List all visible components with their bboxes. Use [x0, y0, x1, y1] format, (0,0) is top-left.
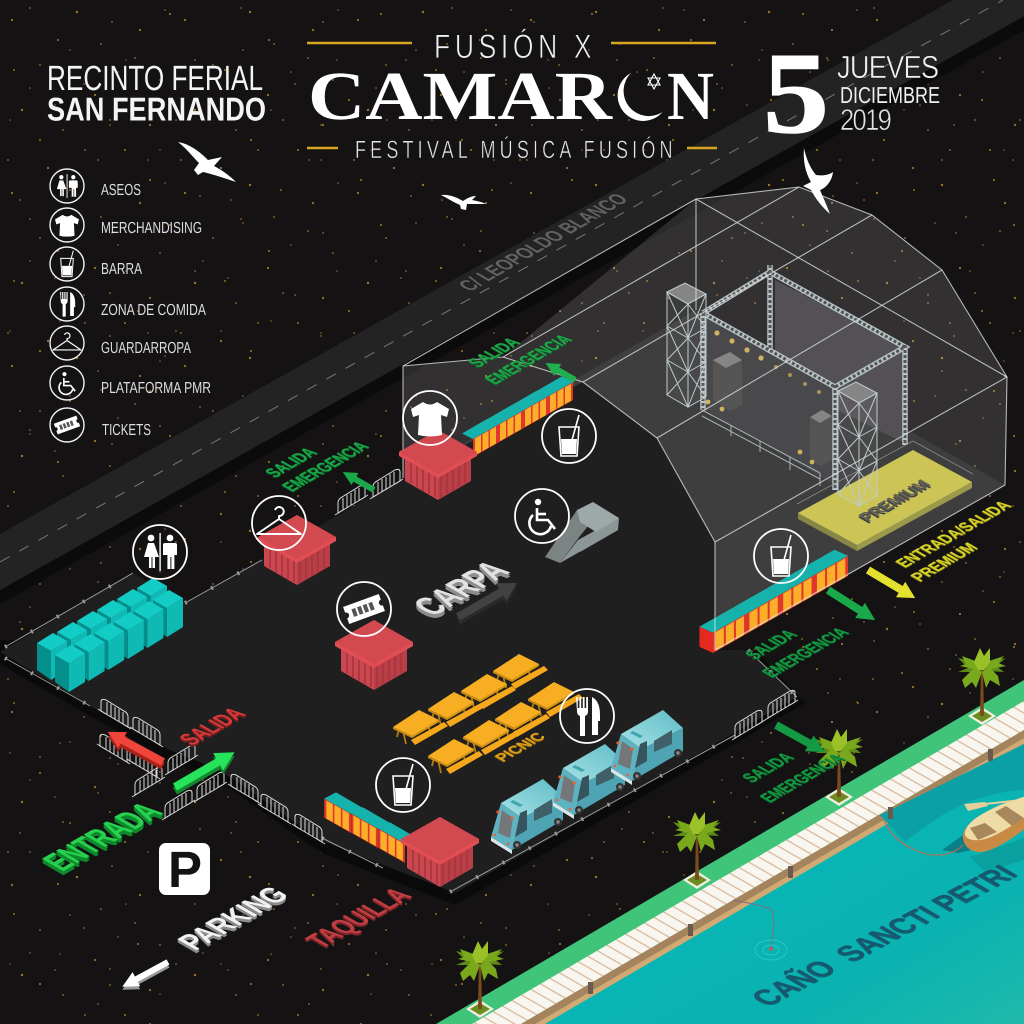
booth: taquilla [401, 817, 479, 887]
map icon: aseos [133, 525, 187, 579]
legend: plataforma pmr [50, 366, 211, 400]
shuttle buses [491, 710, 683, 854]
label: salida emergencia top [464, 332, 577, 388]
label: salida emergencia tent: SALIDA [741, 627, 803, 662]
legend: aseos: ASEOS [101, 182, 141, 199]
legend: merchandising [50, 208, 202, 242]
arrow: emergency tent [823, 582, 880, 628]
label: parking: PARKING [170, 882, 296, 954]
legend: barra: BARRA [101, 261, 142, 278]
label: salida red: SALIDA [174, 704, 252, 749]
wheelchair platform [545, 502, 619, 563]
date: 2019 [840, 104, 892, 137]
crowd barriers [97, 469, 798, 844]
canal: green verge, boardwalk and water [436, 680, 1024, 1024]
right tower [838, 382, 877, 506]
label: salida emergencia tent [741, 625, 854, 680]
map icon: merchandising [403, 391, 457, 445]
legend: barra [50, 247, 142, 281]
venue title: RECINTO FERIAL [47, 59, 263, 98]
legend: aseos [50, 169, 141, 203]
picnic tables [393, 654, 583, 774]
arrow: premium yellow [863, 562, 920, 606]
label: salida emergencia lower right [738, 750, 851, 806]
map icon: barra top [542, 409, 596, 463]
tent canvas [403, 187, 1007, 650]
arrow: salida red [103, 724, 167, 774]
picnic label: PICNIC [492, 730, 550, 764]
label: salida emergencia left: SALIDA [261, 445, 323, 480]
road name: C/ LEOPOLDO BLANCO [453, 190, 634, 294]
front rail [702, 410, 820, 486]
legend: guardarropa [50, 326, 191, 360]
festival heading: CAMAR [308, 58, 613, 134]
bar: taquilla side [324, 792, 417, 863]
legend: zona de comida: ZONA DE COMIDA [101, 302, 206, 319]
festival heading: N [667, 58, 714, 134]
bar: premium side [700, 550, 848, 653]
legend: guardarropa: GUARDARROPA [101, 340, 191, 357]
legend [50, 169, 211, 442]
map icon: barra tent [754, 529, 808, 583]
left tower [667, 283, 706, 407]
premium text: PREMIUM [854, 477, 936, 524]
fishing line and float [733, 900, 787, 960]
festival heading: FESTIVAL MÚSICA FUSIÓN [355, 136, 673, 164]
label: taquilla: TAQUILLA [299, 884, 419, 952]
crescent [618, 73, 662, 121]
legend: tickets: TICKETS [102, 422, 151, 439]
festival heading [307, 28, 717, 164]
label: salida emergencia left [261, 439, 374, 494]
stage deck [700, 313, 835, 485]
date: 5 [763, 30, 829, 158]
venue title: SAN FERNANDO [47, 90, 266, 128]
parking sign [159, 841, 210, 898]
label: entrada: ENTRADA [33, 796, 171, 876]
arrow: emergency top [542, 357, 578, 386]
premium platform [797, 441, 973, 551]
map icon: comida [560, 689, 614, 743]
label: entrada/salida premium [891, 498, 1016, 584]
date [763, 30, 940, 158]
label: salida emergencia left: EMERGENCIA [278, 439, 374, 494]
map icon: tickets [337, 582, 391, 636]
date: DICIEMBRE [840, 82, 940, 108]
arrow: carpa [453, 574, 522, 630]
legend: tickets [50, 408, 151, 442]
rowing boat [884, 796, 1024, 872]
stage lights [706, 330, 821, 464]
tent frame [403, 187, 1007, 650]
toilet blocks [37, 578, 183, 692]
parking sign: P [168, 841, 202, 898]
speaker stack right [810, 410, 832, 466]
arrow: entrada green [170, 744, 240, 800]
speaker stack left [713, 352, 742, 411]
truss beams [703, 265, 905, 490]
arrow: emergency lower right [772, 717, 829, 760]
video screen [775, 280, 905, 443]
map icon: barra bottom [376, 758, 430, 812]
venue title [47, 59, 266, 128]
date: JUEVES [837, 49, 939, 85]
legend: plataforma pmr: PLATAFORMA PMR [101, 380, 211, 397]
label: salida emergencia tent: EMERGENCIA [758, 625, 854, 680]
map icon: plataforma PMR [515, 489, 569, 543]
carpa label: CARPA [404, 556, 518, 621]
bird centre [441, 195, 486, 210]
label: salida emergencia top: EMERGENCIA [481, 332, 577, 388]
bar: back of tent [462, 376, 573, 457]
legend: zona de comida [50, 287, 206, 321]
festival heading: FUSIÓN X [434, 28, 592, 66]
perimeter fence [5, 560, 797, 892]
venue floor [0, 310, 1005, 905]
stage: truss, screen, speakers, towers [667, 265, 905, 490]
map icon: guardarropa [252, 496, 306, 550]
star [648, 74, 660, 89]
booth: guardarropa [258, 515, 336, 585]
bird left [178, 142, 236, 182]
label: entrada/salida premium: PREMIUM [906, 540, 982, 584]
label: salida emergencia lower right: EMERGENCIA [756, 751, 851, 806]
booth: tickets [335, 620, 413, 690]
legend: merchandising: MERCHANDISING [101, 220, 202, 237]
arrow: parking [118, 955, 172, 997]
label: salida emergencia lower right: SALIDA [738, 750, 800, 786]
label: salida emergencia top: SALIDA [464, 335, 526, 370]
bird right [803, 148, 833, 214]
palm trees [456, 648, 1006, 1018]
booth: merchandising [399, 430, 477, 500]
arrow: emergency left [339, 466, 378, 496]
